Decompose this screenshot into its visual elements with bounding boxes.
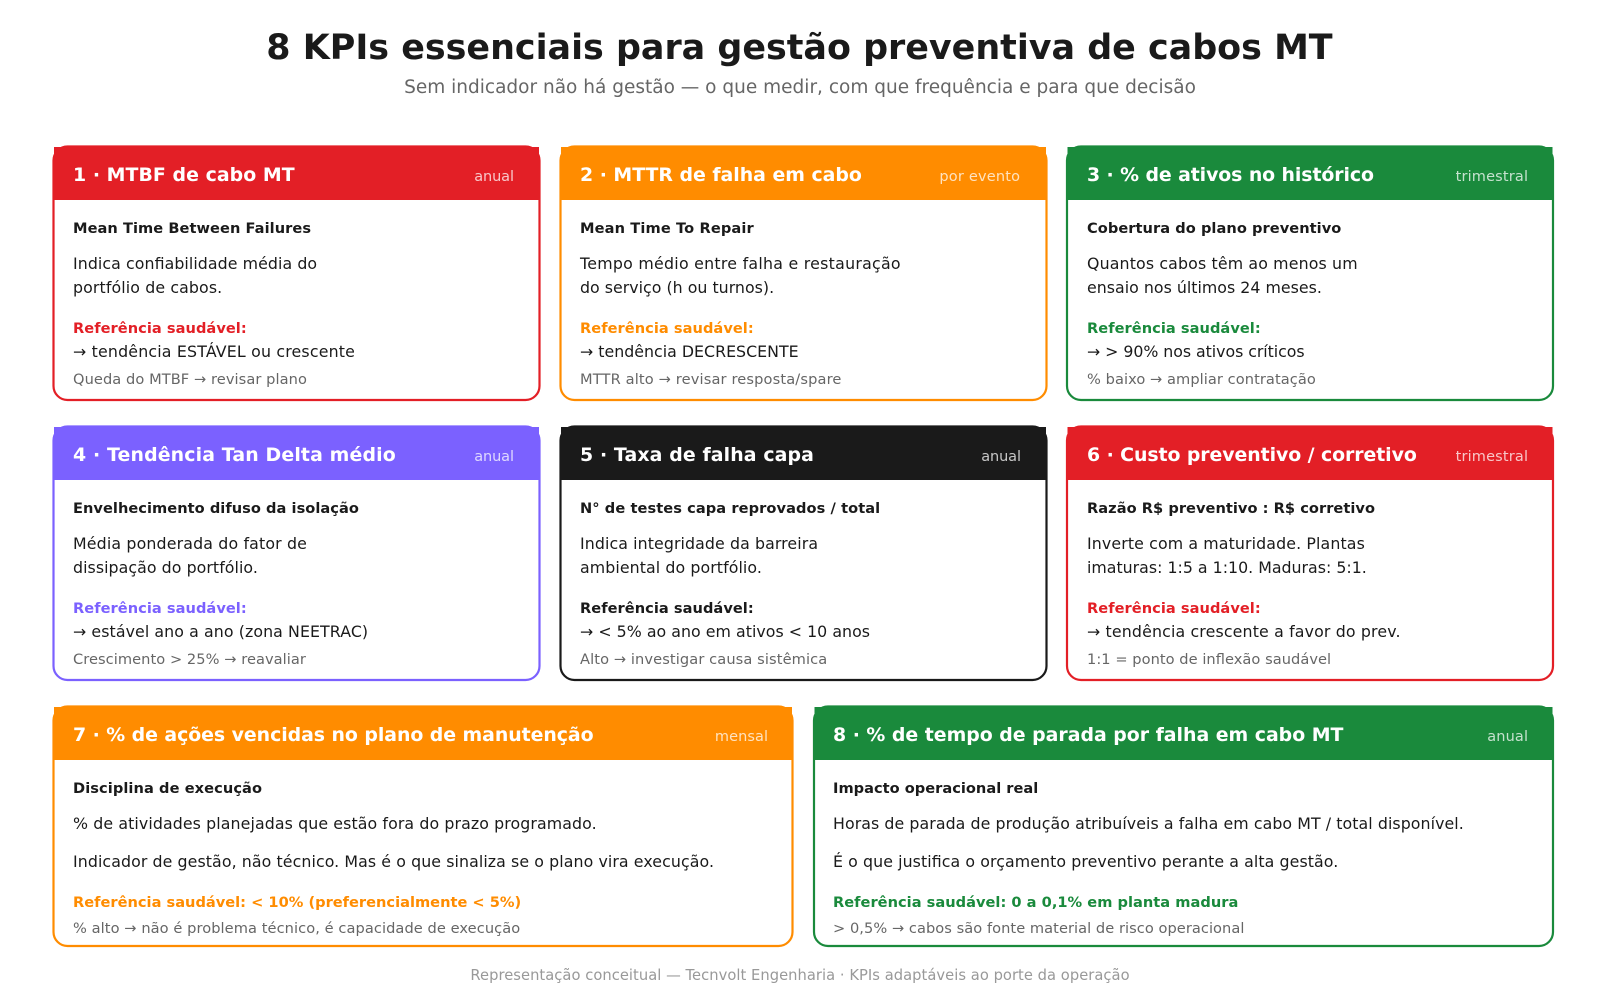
description: KPI 3 [1087,254,1358,297]
header: KPI 5 [561,427,1046,480]
healthy reference: KPI 5 [580,600,870,641]
description: KPI 4: dissipação do portfólio. [73,558,258,577]
panel: KPI 3 ativos no histórico [1067,146,1553,400]
note: KPI 4: Crescimento > 25% → reavaliar [73,651,306,668]
panel: KPI 6 Custo preventivo / corretivo [1067,426,1553,680]
header: KPI 3: 3 · % de ativos no histórico [1087,164,1374,186]
header: KPI 8 [814,707,1552,760]
header: KPI 2 [561,147,1046,200]
header: KPI 6: trimestral [1456,449,1528,465]
healthy reference: KPI 6: → tendência crescente a favor do prev. [1087,622,1400,641]
healthy reference: KPI 2: Referência saudável: [580,320,754,337]
description: KPI 6 [1087,534,1367,577]
description: KPI 2: do serviço (h ou turnos). [580,278,774,297]
healthy reference: KPI 5: Referência saudável: [580,600,754,617]
description: KPI 6: Inverte com a maturidade. Plantas [1087,534,1365,553]
panel: KPI 4 Tan Delta [54,426,540,680]
header: KPI 5: 5 · Taxa de falha capa [580,444,814,466]
description: KPI 8: É o que justifica o orçamento preventivo perante a alta gestão. [833,852,1338,871]
description: KPI 2 [579,254,901,297]
healthy reference: KPI 4 [73,600,368,641]
header: KPI 7: mensal [715,729,768,745]
healthy reference: KPI 3 [1087,320,1305,361]
definition: KPI 1: Mean Time Between Failures [73,220,311,237]
healthy reference: KPI 6 [1087,600,1400,641]
header: KPI 3: trimestral [1456,169,1528,185]
healthy reference: KPI 4: Referência saudável: [73,600,247,617]
definition: KPI 5: N° de testes capa reprovados / total [580,500,880,517]
panel: KPI 8 tempo de parada [814,706,1553,946]
header: KPI 1 [54,147,539,200]
header: KPI 6 [1068,427,1552,480]
description: KPI 7: % de atividades planejadas que estão fora do prazo programado. [73,814,597,833]
header: KPI 7 [54,707,792,760]
description: KPI 7 [73,814,714,871]
header: KPI 7: 7 · % de ações vencidas no plano de manutenção [73,724,594,746]
description: KPI 3: ensaio nos últimos 24 meses. [1087,278,1322,297]
description: KPI 1: portfólio de cabos. [73,278,222,297]
healthy reference: KPI 5: → < 5% ao ano em ativos < 10 anos [580,622,870,641]
panel: KPI 5 Taxa de falha capa [560,426,1046,680]
header: KPI 4: 4 · Tendência Tan Delta médio [73,444,396,466]
description: KPI 8: Horas de parada de produção atribuíveis a falha em cabo MT / total disponível. [833,814,1464,833]
header: KPI 2: por evento [939,169,1020,185]
header: KPI 8: 8 · % de tempo de parada por falha em cabo MT [833,724,1344,746]
healthy reference: KPI 7: Referência saudável: < 10% (preferencialmente < 5%) [73,894,521,911]
note: KPI 5: Alto → investigar causa sistêmica [580,651,827,668]
description: KPI 5: Indica integridade da barreira [580,534,818,553]
healthy reference: KPI 2: → tendência DECRESCENTE [580,342,799,361]
panel: KPI 1 MTBF [54,146,540,400]
description: KPI 5 [580,534,818,577]
definition: KPI 7: Disciplina de execução [73,780,262,797]
header: KPI 4: anual [474,449,514,465]
definition: KPI 6: Razão R$ preventivo : R$ corretivo [1087,500,1375,517]
definition: KPI 3: Cobertura do plano preventivo [1087,220,1341,237]
subtitle: Sem indicador não há gestão — o que medir, com que frequência e para que decisão [404,77,1196,98]
description: KPI 8 [833,814,1464,871]
header: KPI 8: anual [1487,729,1528,745]
header: KPI 2: 2 · MTTR de falha em cabo [580,164,862,186]
description: KPI 1 [73,254,317,297]
healthy reference: KPI 2 [580,320,799,361]
header: KPI 4 [54,427,539,480]
healthy reference: KPI 1: → tendência ESTÁVEL ou crescente [73,342,355,361]
healthy reference: KPI 3: Referência saudável: [1087,320,1261,337]
healthy reference: KPI 1 [73,320,355,361]
note: KPI 1: Queda do MTBF → revisar plano [73,371,307,388]
title: 8 KPIs essenciais para gestão preventiva de cabos MT [266,28,1333,68]
header: KPI 1: anual [474,169,514,185]
note: KPI 7: % alto → não é problema técnico, é capacidade de execução [73,920,520,937]
healthy reference: KPI 4: → estável ano a ano (zona NEETRAC) [73,622,368,641]
note: KPI 3: % baixo → ampliar contratação [1087,371,1316,388]
healthy reference: KPI 6: Referência saudável: [1087,600,1261,617]
healthy reference: KPI 3: → > 90% nos ativos críticos [1087,342,1305,361]
description: KPI 1: Indica confiabilidade média do [73,254,317,273]
definition: KPI 8: Impacto operacional real [833,780,1038,797]
description: KPI 3: Quantos cabos têm ao menos um [1087,254,1358,273]
note: KPI 6: 1:1 = ponto de inflexão saudável [1087,651,1331,668]
footer note: Representação conceitual — Tecnvolt Engenharia · KPIs adaptáveis ao porte da operação [470,967,1130,984]
description: KPI 2: Tempo médio entre falha e restauração [579,254,901,273]
healthy reference: KPI 8: Referência saudável: 0 a 0,1% em planta madura [833,894,1238,911]
description: KPI 4 [73,534,307,577]
header: KPI 1: 1 · MTBF de cabo MT [73,164,295,186]
healthy reference: KPI 1: Referência saudável: [73,320,247,337]
definition: KPI 4: Envelhecimento difuso da isolação [73,500,359,517]
note: KPI 8: > 0,5% → cabos são fonte material de risco operacional [833,920,1244,937]
header: KPI 5: anual [981,449,1021,465]
header: KPI 3 [1068,147,1552,200]
note: KPI 2: MTTR alto → revisar resposta/spare [580,371,841,388]
panel: KPI 2 MTTR [560,146,1046,400]
description: KPI 6: imaturas: 1:5 a 1:10. Maduras: 5:1. [1087,558,1367,577]
definition: KPI 2: Mean Time To Repair [580,220,754,237]
panel: KPI 7 ações vencidas [54,706,792,946]
description: KPI 4: Média ponderada do fator de [73,534,307,553]
description: KPI 5: ambiental do portfólio. [580,558,762,577]
description: KPI 7: Indicador de gestão, não técnico. Mas é o que sinaliza se o plano vira execução. [73,852,714,871]
header: KPI 6: 6 · Custo preventivo / corretivo [1087,444,1417,466]
